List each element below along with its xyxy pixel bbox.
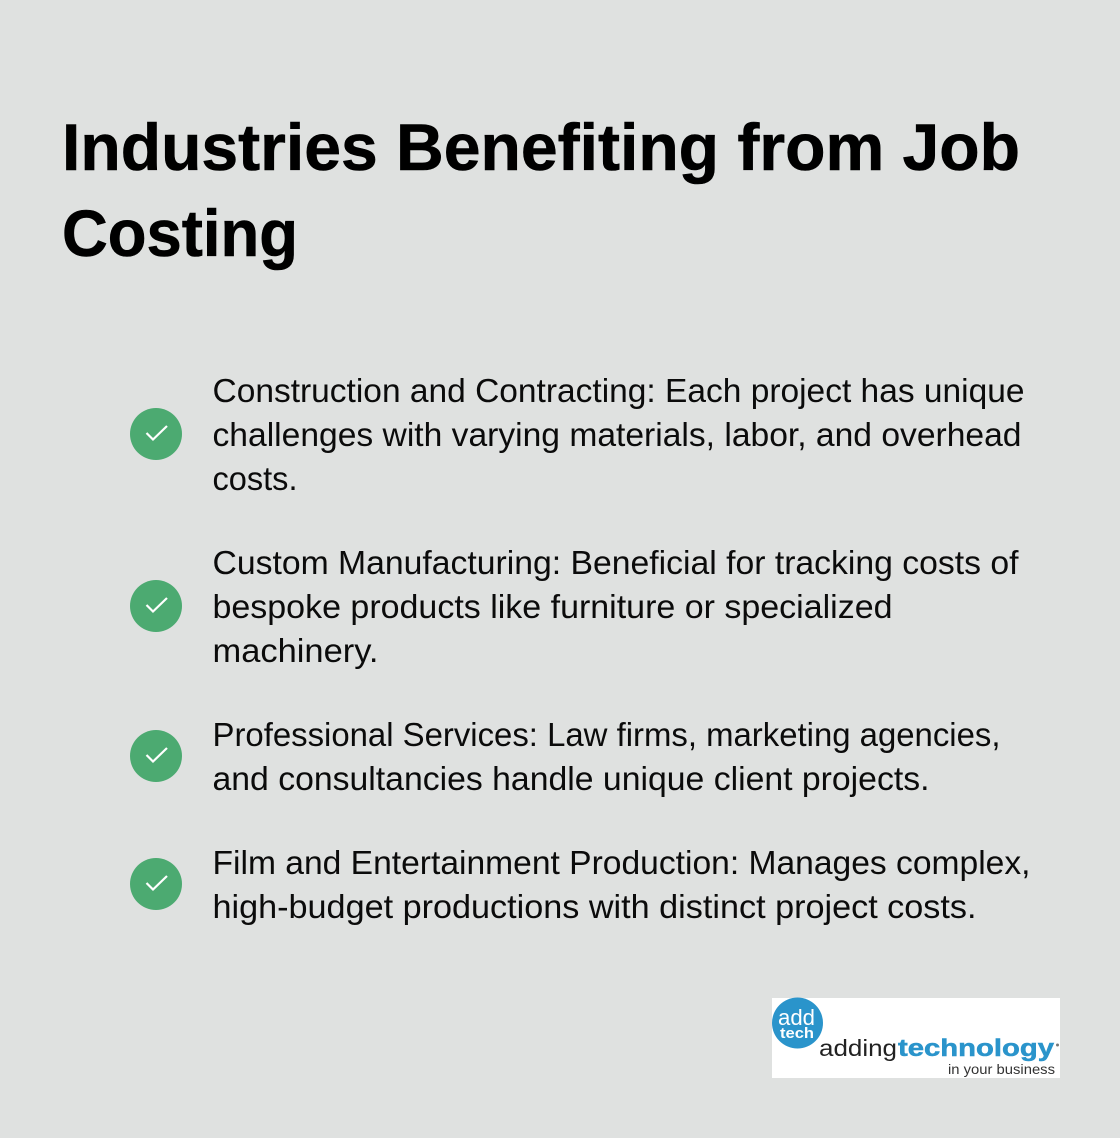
text: film: high-budget productions with distinct project costs. bbox=[212, 888, 976, 925]
icon: check bbox=[130, 730, 182, 782]
logo bbox=[772, 998, 1060, 1078]
text: professional services: Professional Services: Law firms, marketing agencies, bbox=[212, 716, 1000, 753]
text: manufacturing: machinery. bbox=[212, 632, 378, 669]
logo tagline: in your business bbox=[948, 1061, 1055, 1077]
logo badge bbox=[772, 998, 823, 1048]
logo wordmark: technology bbox=[898, 1035, 1055, 1062]
icon: check bbox=[130, 858, 182, 910]
logo badge: add bbox=[778, 1005, 815, 1030]
text: manufacturing: bespoke products like furniture or specialized bbox=[212, 588, 892, 625]
text: construction: Construction and Contracting: Each project has unique bbox=[212, 372, 1024, 409]
logo wordmark bbox=[819, 1035, 1059, 1062]
item: film bbox=[130, 844, 1030, 925]
logo badge: tech bbox=[780, 1025, 814, 1042]
text: manufacturing: Custom Manufacturing: Beneficial for tracking costs of bbox=[212, 544, 1019, 581]
text: construction bbox=[212, 372, 1024, 497]
text: film bbox=[212, 844, 1030, 925]
text: professional services: and consultancies handle unique client projects. bbox=[212, 760, 930, 797]
icon: check bbox=[130, 580, 182, 632]
text: manufacturing bbox=[212, 544, 1019, 669]
item: professional services bbox=[130, 716, 1000, 797]
item: construction bbox=[130, 372, 1024, 497]
title: Costing bbox=[62, 196, 298, 270]
logo wordmark: adding bbox=[819, 1035, 897, 1061]
item: manufacturing bbox=[130, 544, 1019, 669]
icon: check bbox=[130, 408, 182, 460]
text: professional services bbox=[212, 716, 1000, 797]
title: Industries Benefiting from Job bbox=[62, 110, 1020, 184]
text: film: Film and Entertainment Production: Manages complex, bbox=[212, 844, 1030, 881]
text: construction: costs. bbox=[212, 460, 298, 497]
text: construction: challenges with varying materials, labor, and overhead bbox=[212, 416, 1021, 453]
title bbox=[62, 110, 1020, 270]
